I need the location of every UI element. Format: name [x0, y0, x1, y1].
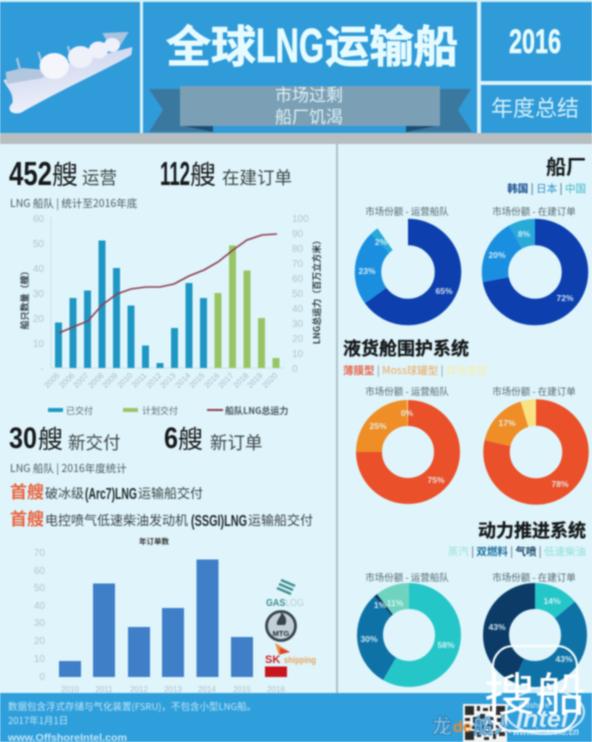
- axis values: 40: [34, 601, 45, 612]
- ribbon: subtitle: 船厂饥渴: [275, 103, 343, 128]
- axis values: [34, 548, 45, 683]
- chart legend: 船队LNG总运力: [225, 404, 288, 417]
- donut: propulsion operating fleet: 58%: [437, 640, 455, 650]
- donut: containment operating fleet: 市场份额 - 运营船队: [365, 384, 449, 398]
- watermark: site name: www.imarine.cn: [513, 726, 579, 738]
- left axis ticks: 10: [33, 339, 44, 350]
- first SSGI delivery: 首艘: [10, 505, 44, 530]
- right axis ticks: 80: [292, 244, 304, 255]
- logo: MTG: MTG: [273, 629, 289, 638]
- donut: propulsion order book: 43%: [488, 622, 506, 632]
- first SSGI delivery: (SSGI)LNG: [191, 513, 247, 530]
- stat: 30 delivered: 30: [9, 422, 37, 455]
- donut: shipyard order book: 市场份额 - 在建订单: [492, 204, 576, 218]
- right axis title: LNG总运力（百万立方米）: [310, 236, 323, 344]
- chart legend: [48, 404, 288, 417]
- year labels: 2014: [173, 371, 193, 390]
- donut: propulsion operating fleet: [360, 570, 455, 674]
- axis values: 0: [39, 672, 45, 683]
- year labels: 2010: [61, 685, 79, 694]
- title: 全球: [166, 11, 256, 75]
- year labels: 2013: [158, 371, 178, 390]
- chart: annual orders: [34, 536, 287, 694]
- right axis ticks: 60: [292, 274, 304, 285]
- title: 运输船: [325, 11, 458, 75]
- legend: 韩国 | 日本 | 中国: [507, 181, 586, 196]
- year labels: 2012: [130, 685, 148, 694]
- year labels: [42, 371, 280, 390]
- year labels: 2019: [245, 371, 265, 390]
- donut: propulsion operating fleet: 1%: [374, 600, 387, 610]
- donut: containment operating fleet: 0%: [401, 408, 414, 418]
- year labels: 2011: [130, 371, 149, 390]
- heading: 液货舱围护系统: [343, 335, 469, 361]
- axis values: 70: [34, 548, 45, 559]
- stat: 112 on order: 112: [160, 155, 190, 192]
- logo: SK shipping: SK: [265, 654, 280, 666]
- year labels: 2018: [231, 371, 251, 390]
- ribbon: subtitle: [149, 81, 472, 133]
- year labels: 2011: [95, 685, 113, 694]
- donut: shipyard operating fleet: [358, 204, 453, 312]
- planned bars: [214, 246, 280, 368]
- year labels: 2012: [144, 371, 164, 390]
- year labels: 2016: [267, 685, 285, 694]
- right axis ticks: 70: [292, 259, 304, 270]
- donut: propulsion order book: [488, 570, 576, 674]
- donut: shipyard operating fleet: 2%: [375, 237, 388, 247]
- right axis ticks: 50: [292, 289, 304, 300]
- stat: 30 delivered: [9, 420, 120, 456]
- right axis ticks: 0: [292, 364, 298, 375]
- donut: containment order book: [492, 384, 576, 492]
- first SSGI delivery: 运输船交付: [248, 510, 313, 529]
- year labels: 2005: [42, 371, 62, 390]
- right axis ticks: 10: [292, 349, 304, 360]
- chart legend: 计划交付: [142, 404, 178, 417]
- donut: containment order book: 78%: [551, 479, 569, 489]
- left axis ticks: 30: [33, 289, 44, 300]
- column divider: [336, 144, 338, 693]
- stat: 452 in operation: [9, 155, 117, 192]
- legend: 蒸汽 | 双燃料 | 气喷 | 低速柴油: [448, 544, 586, 559]
- year labels: 2008: [86, 371, 106, 390]
- logo: SK shipping: shipping: [284, 655, 316, 665]
- left axis ticks: 60: [33, 214, 44, 225]
- icon: LNG carrier ship: [3, 33, 132, 113]
- donut: shipyard order book: 20%: [488, 250, 506, 260]
- donut: shipyard operating fleet: 65%: [435, 286, 453, 296]
- legend: 薄膜型 | Moss球罐型 | 其他类型: [343, 363, 488, 378]
- annual summary label: 年度总结: [491, 91, 579, 123]
- footer band: [0, 693, 592, 742]
- stat: 452 in operation: 运营: [82, 165, 117, 190]
- 2016 subtitle: LNG 船队 | 2016年度统计: [10, 461, 127, 476]
- watermark: site name: 船人: [473, 710, 513, 739]
- donut: containment operating fleet: 75%: [427, 475, 445, 485]
- year labels: 2006: [57, 371, 77, 390]
- first SSGI delivery: 电控喷气低速柴油发动机: [45, 510, 188, 529]
- logo: Offshore Intel: Intel: [516, 706, 569, 733]
- donut: propulsion operating fleet: 11%: [387, 598, 404, 608]
- axis values: 10: [34, 654, 45, 665]
- left axis ticks: 50: [33, 239, 44, 250]
- right axis ticks: [292, 214, 309, 375]
- donut: propulsion operating fleet: 市场份额 - 运营船队: [365, 570, 449, 584]
- watermark: 搜船 badge: 搜船: [484, 659, 586, 725]
- stat: 452 in operation: 452: [9, 155, 52, 192]
- left axis ticks: 20: [33, 314, 44, 325]
- right axis ticks: 40: [292, 304, 304, 315]
- right axis ticks: 20: [292, 334, 304, 345]
- logo: Offshore Intel: Offshore: [519, 701, 550, 710]
- stat: 6 new orders: 新订单: [210, 430, 262, 455]
- donut: containment order book: 17%: [498, 418, 516, 428]
- watermark: site name: 龙: [432, 710, 452, 739]
- panel: propulsion: [360, 517, 586, 674]
- year labels: 2015: [233, 685, 251, 694]
- first Arc7 delivery: 破冰级: [45, 483, 84, 502]
- year labels: [61, 685, 285, 694]
- stat: 112 on order: 在建订单: [222, 165, 292, 190]
- donut: shipyard order book: [488, 204, 576, 312]
- first SSGI delivery: [10, 505, 313, 530]
- donut: shipyard operating fleet: 市场份额 - 运营船队: [365, 204, 449, 218]
- donut: containment order book: 市场份额 - 在建订单: [492, 384, 576, 398]
- axis values: 50: [34, 583, 45, 594]
- watermark: site name: de: [453, 719, 472, 736]
- left axis ticks: 40: [33, 264, 44, 275]
- year labels: 2009: [100, 371, 120, 390]
- panel: cargo containment: [343, 335, 576, 492]
- year labels: 2015: [187, 371, 207, 390]
- logo: GasLog: [266, 580, 304, 609]
- panel: shipyards: [358, 151, 586, 312]
- delivered bars: [55, 240, 207, 368]
- stat: 30 delivered: 新交付: [68, 430, 120, 455]
- year labels: 2014: [198, 685, 216, 694]
- axis values: 30: [34, 618, 45, 629]
- year labels: 2013: [164, 685, 182, 694]
- left axis title: 船只数量（艘）: [18, 266, 31, 330]
- year: 2016: [509, 23, 561, 61]
- stat: 6 new orders: 艘: [178, 420, 203, 456]
- logo: GasLog: GASLOG: [266, 598, 304, 609]
- donut: shipyard order book: 72%: [556, 293, 574, 303]
- fleet subtitle: LNG 船队 | 统计至2016年底: [10, 196, 138, 211]
- right axis ticks: 90: [292, 229, 304, 240]
- heading: 船厂: [546, 151, 586, 180]
- ribbon: subtitle: 市场过剩: [275, 81, 343, 106]
- right axis ticks: 30: [292, 319, 304, 330]
- footer notes: 数据包含浮式存储与气化装置(FSRU)，不包含小型LNG船。: [8, 699, 256, 713]
- first Arc7 delivery: 运输船交付: [138, 483, 203, 502]
- footer notes: 2017年1月1日: [8, 713, 68, 727]
- header band: [0, 0, 592, 144]
- donut: shipyard order book: 8%: [518, 229, 531, 239]
- watermark: site name: [432, 710, 579, 739]
- capacity line: [59, 234, 277, 333]
- year labels: 2017: [216, 371, 236, 390]
- donut: propulsion order book: 市场份额 - 在建订单: [492, 570, 576, 584]
- chart legend: 已交付: [66, 404, 93, 417]
- year labels: 2016: [202, 371, 222, 390]
- year labels: 2007: [71, 371, 91, 390]
- chart title: 年订单数: [139, 536, 169, 547]
- year labels: 2020: [260, 371, 280, 390]
- logo: MTG: [266, 612, 296, 640]
- left axis ticks: [33, 214, 44, 375]
- title: [166, 11, 458, 75]
- heading: 动力推进系统: [478, 517, 586, 543]
- donut: propulsion order book: 14%: [543, 596, 561, 606]
- stat: 452 in operation: 艘: [52, 155, 78, 192]
- donut: propulsion order book: 43%: [555, 654, 573, 664]
- order bars: [59, 560, 253, 677]
- chart: fleet bars and capacity line: [18, 214, 323, 390]
- axis values: 20: [34, 636, 45, 647]
- stat: 6 new orders: 6: [164, 422, 178, 455]
- logo: Offshore Intel: [506, 690, 584, 734]
- stat: 112 on order: [160, 155, 292, 192]
- axis values: 60: [34, 566, 45, 577]
- donut: propulsion operating fleet: 30%: [360, 634, 378, 644]
- stat: 6 new orders: [164, 420, 262, 456]
- stat: 112 on order: 艘: [190, 155, 216, 192]
- QR code: [463, 704, 507, 742]
- first Arc7 delivery: 首艘: [10, 478, 44, 503]
- right axis ticks: 100: [292, 214, 309, 225]
- logo: SK shipping: [265, 643, 316, 666]
- first Arc7 delivery: (Arc7)LNG: [85, 486, 137, 503]
- year labels: 2010: [115, 371, 135, 390]
- first Arc7 delivery: [10, 478, 203, 503]
- stat: 30 delivered: 艘: [38, 420, 63, 456]
- left axis ticks: -: [41, 364, 44, 375]
- donut: containment operating fleet: [365, 384, 449, 491]
- footer notes: [7, 699, 256, 742]
- donut: containment operating fleet: 25%: [369, 421, 387, 431]
- title: LNG: [256, 20, 324, 73]
- donut: shipyard operating fleet: 23%: [358, 266, 376, 276]
